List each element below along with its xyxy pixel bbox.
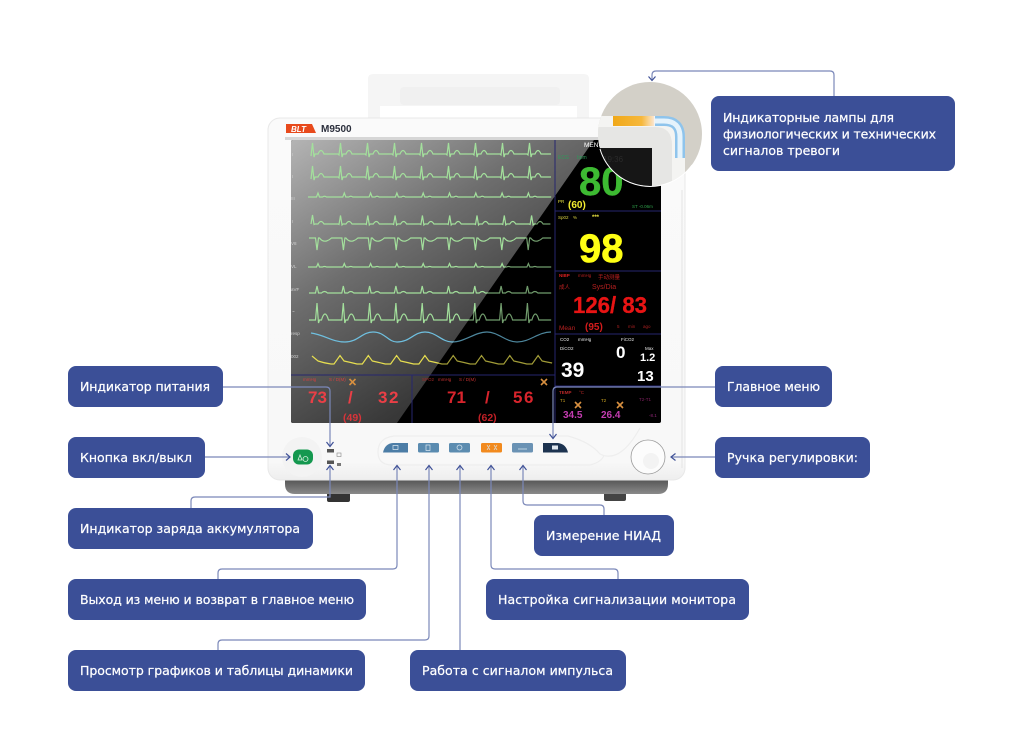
panel: invasive pressure 2: SPO2 xyxy=(422,377,435,382)
panel: invasive pressure 2: / xyxy=(485,388,490,407)
monitor base xyxy=(285,478,668,502)
label: battery indicator: Индикатор заряда аккумулятора xyxy=(80,521,300,536)
screen glare xyxy=(291,140,594,423)
connector: knob xyxy=(671,454,715,460)
panel: invasive pressure 2: (62) xyxy=(478,412,497,424)
lead labels: aVF xyxy=(291,287,300,292)
orange lamp xyxy=(613,116,654,126)
lead labels: I xyxy=(292,152,293,157)
panel: temperature: T2 xyxy=(601,398,607,403)
panel: NIBP: 成人 xyxy=(559,283,571,291)
panel: invasive pressure 2: 56 xyxy=(513,388,535,407)
panel: NIBP: 5 xyxy=(617,324,620,329)
right side edge xyxy=(681,190,683,468)
panel: ECG heart rate: ST -0.06m xyxy=(632,204,653,209)
blue lamp xyxy=(655,121,680,158)
panel: temperature: 26.4 xyxy=(601,410,621,421)
panel: CO2: FiCO2 xyxy=(621,337,634,342)
panel: CO2: Max xyxy=(645,346,654,351)
lead labels: I xyxy=(292,174,293,179)
panel: invasive pressure 1: mmHg xyxy=(303,377,317,382)
connector: lamp indicators xyxy=(648,71,834,96)
panel: temperature: T1 xyxy=(560,398,566,403)
panel: invasive pressure 2: 71 xyxy=(447,388,466,407)
label: main menu: Главное меню xyxy=(727,379,820,394)
panel: temperature: 34.5 xyxy=(563,410,583,421)
panel: NIBP: ago xyxy=(643,324,651,329)
panel: CO2: 13 xyxy=(637,368,654,385)
panel: ECG heart rate: PR xyxy=(558,199,565,204)
label: battery indicator xyxy=(68,508,313,549)
panel: invasive pressure 1: (49) xyxy=(343,412,362,424)
panel: ECG heart rate: ECG xyxy=(558,155,569,161)
adjustment knob xyxy=(631,440,665,474)
magnified lamp inset: 19:36 xyxy=(603,155,624,164)
panel: CO2: DiCO2 xyxy=(560,346,574,351)
lead labels: ~ xyxy=(292,309,295,314)
panel: SpO2 xyxy=(558,214,623,263)
panel: NIBP xyxy=(559,273,651,333)
label: pulse signal: Работа с сигналом импульса xyxy=(422,663,613,678)
label: exit menu xyxy=(68,579,366,620)
connector: pulse signal xyxy=(456,466,464,650)
label: lamp indicators: сигналов тревоги xyxy=(723,143,840,158)
panel: CO2: CO2 xyxy=(560,337,570,342)
panel: invasive pressure 2 xyxy=(422,377,547,424)
panel: NIBP: min xyxy=(628,324,636,329)
connector: main menu xyxy=(550,387,715,438)
panel: temperature: T2-T1 xyxy=(639,397,651,402)
panel: SpO2: Sp02 xyxy=(558,215,569,220)
magnified lamp inset xyxy=(598,82,702,186)
panel: NIBP: 126/ 83 xyxy=(573,292,647,318)
panel: temperature: TEMP xyxy=(559,390,572,395)
panel: ECG heart rate: 80 xyxy=(579,160,624,204)
monitor xyxy=(268,74,706,502)
connector: power button xyxy=(205,454,290,460)
label: adjustment knob xyxy=(715,437,870,478)
panel: CO2 xyxy=(560,337,655,385)
CO2 waveform xyxy=(312,356,552,364)
panel: ECG heart rate: bpm xyxy=(577,155,587,161)
label: power button xyxy=(68,437,205,478)
panel: temperature: -8.1 xyxy=(649,413,657,418)
bezel corner xyxy=(596,116,685,190)
label: power button: Кнопка вкл/выкл xyxy=(80,450,192,465)
label: adjustment knob: Ручка регулировки: xyxy=(727,450,858,465)
brand logo xyxy=(286,124,352,135)
brand logo: BLT xyxy=(291,125,307,134)
label: lamp indicators: Индикаторные лампы для xyxy=(723,110,894,125)
label: alarm settings: Настройка сигнализации монитора xyxy=(498,592,736,607)
label: exit menu: Выход из меню и возврат в главное меню xyxy=(80,592,354,607)
connector: exit menu xyxy=(218,466,400,579)
panel: SpO2: % xyxy=(573,215,577,220)
label: pulse signal xyxy=(410,650,626,691)
connector: power indicator xyxy=(222,387,334,446)
brand logo: M9500 xyxy=(321,124,352,135)
label: NIBP: Измерение НИАД xyxy=(546,528,661,543)
lead labels: III xyxy=(291,196,295,201)
connector: battery indicator xyxy=(191,466,334,508)
label: lamp indicators: физиологических и технических xyxy=(723,126,936,142)
panel: CO2: 0 xyxy=(616,343,625,362)
menu buttons xyxy=(383,443,568,452)
screen xyxy=(291,140,661,424)
lead labels: resp xyxy=(291,331,300,336)
panel: invasive pressure 1: / xyxy=(348,388,353,407)
panel: NIBP: Sys/Dia xyxy=(592,284,616,291)
connector: trends xyxy=(218,466,432,650)
screen dimming on dark side xyxy=(438,220,661,423)
power button xyxy=(282,437,322,477)
panel: invasive pressure 1 xyxy=(303,377,400,424)
front panel wave xyxy=(378,428,640,465)
panel: invasive pressure 1: 32 xyxy=(378,388,400,407)
ECG waveforms xyxy=(308,143,551,323)
inset outline xyxy=(600,149,692,186)
panel: temperature xyxy=(559,390,656,418)
panel: NIBP: Mean xyxy=(559,325,576,332)
panel dividers xyxy=(291,140,661,423)
label: NIBP xyxy=(534,515,674,556)
panel: CO2: mmHg xyxy=(578,337,592,342)
panel: temperature: °C xyxy=(579,390,585,395)
panel: NIBP: (95) xyxy=(585,322,603,333)
label: main menu xyxy=(715,366,832,407)
monitor body xyxy=(268,118,685,480)
panel: invasive pressure 1: 73 xyxy=(308,388,327,407)
label: power indicator: Индикатор питания xyxy=(80,379,210,394)
panel: NIBP: 手动测量 xyxy=(598,273,621,281)
label: alarm settings xyxy=(486,579,749,620)
label: trends xyxy=(68,650,365,691)
inset screen xyxy=(600,148,652,186)
connector: alarm settings xyxy=(488,466,618,579)
status indicators xyxy=(327,449,341,466)
label: power indicator xyxy=(68,366,223,407)
panel: ECG heart rate xyxy=(558,155,653,211)
lead labels: 002 xyxy=(291,354,299,359)
lead labels xyxy=(291,152,300,359)
connector: NIBP xyxy=(520,466,604,515)
lead labels: V8 xyxy=(291,241,297,246)
respiration waveform xyxy=(311,332,551,342)
bezel top shading xyxy=(285,137,665,140)
lead labels: I xyxy=(292,219,293,224)
panel: invasive pressure 2: S / D(M) xyxy=(459,377,476,382)
panel: CO2: 1.2 xyxy=(640,352,655,364)
lead labels: VL xyxy=(291,264,297,269)
label: trends: Просмотр графиков и таблицы динамики xyxy=(80,663,353,678)
menu label: MENU xyxy=(584,142,603,149)
panel: CO2: 39 xyxy=(561,359,584,382)
panel: NIBP: NIBP xyxy=(559,273,570,278)
label: lamp indicators xyxy=(711,96,955,171)
panel: invasive pressure 1: S / D(M) xyxy=(329,377,346,382)
panel: ECG heart rate: (60) xyxy=(568,200,586,211)
panel: NIBP: mmHg xyxy=(578,273,592,278)
panel: SpO2: 98 xyxy=(579,227,624,271)
panel: invasive pressure 2: mmHg xyxy=(438,377,452,382)
panel: SpO2: *** xyxy=(592,215,600,221)
monitor handle xyxy=(368,74,589,118)
